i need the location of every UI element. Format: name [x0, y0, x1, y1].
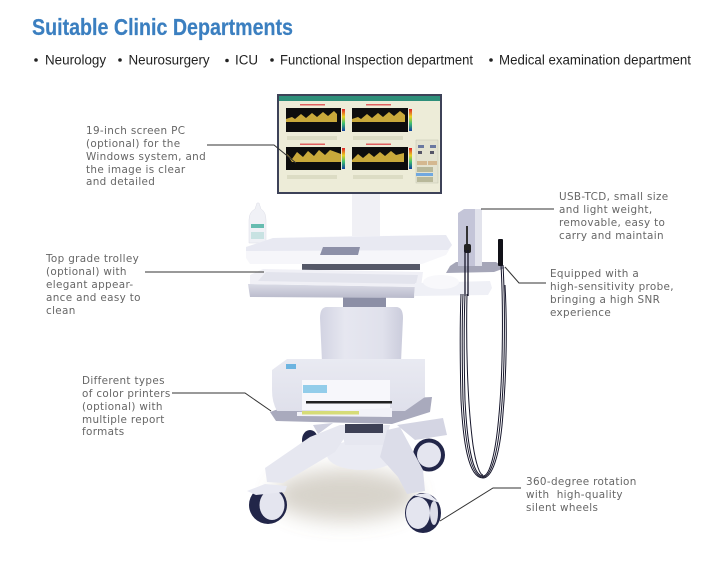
callout: screen PC: and detailed — [86, 176, 155, 188]
callout: trolley: (optional) with — [46, 266, 127, 278]
side shelf — [414, 281, 492, 296]
callout: USB-TCD: removable, easy to — [559, 217, 665, 229]
callout: wheels: silent wheels — [526, 502, 598, 514]
leader line — [505, 267, 546, 283]
probe and cable — [460, 239, 506, 478]
mouse — [423, 275, 459, 289]
screen — [279, 96, 440, 192]
callout: wheels: with high-quality — [526, 489, 623, 501]
callout: probe — [505, 267, 674, 319]
callout: trolley: clean — [46, 305, 76, 317]
monitor — [277, 94, 442, 194]
callout: screen PC: 19-inch screen PC — [86, 125, 185, 137]
callout: trolley: ance and easy to — [46, 292, 141, 304]
callout: printers: of color printers — [82, 388, 171, 400]
callout: wheels — [440, 476, 637, 521]
callout: USB-TCD: USB-TCD, small size — [559, 191, 668, 203]
keyboard tray — [248, 269, 423, 298]
callout: USB-TCD — [481, 191, 668, 242]
wheelbase — [265, 418, 447, 494]
callout: printers: multiple report — [82, 414, 165, 426]
department list: Medical examination department — [499, 52, 691, 68]
department list: Functional Inspection department — [280, 52, 473, 68]
leader line — [481, 208, 554, 210]
department list: ICU — [235, 52, 258, 68]
title: Suitable Clinic Departments — [32, 14, 293, 40]
device: medical trolley — [246, 94, 505, 533]
department list: Neurology — [45, 52, 106, 68]
printer — [272, 359, 425, 417]
callout: probe: high-sensitivity probe, — [550, 281, 674, 293]
callout: printers: formats — [82, 426, 125, 438]
dark tray bar — [302, 264, 420, 270]
callout: screen PC: (optional) for the — [86, 138, 180, 150]
callout: printers: Different types — [82, 375, 165, 387]
front left caster — [247, 484, 287, 524]
leader line — [440, 488, 521, 521]
leader line — [145, 271, 264, 273]
device holder — [446, 262, 505, 273]
stand — [352, 194, 380, 238]
column — [320, 296, 403, 362]
waveform charts — [286, 104, 412, 170]
department list — [34, 52, 691, 68]
department list: Neurosurgery — [128, 52, 210, 68]
tray — [246, 235, 452, 264]
callout: wheels: 360-degree rotation — [526, 476, 637, 488]
floor shadow — [273, 469, 417, 521]
callout: screen PC: the image is clear — [86, 164, 186, 176]
leader line — [207, 145, 296, 163]
callout: probe: bringing a high SNR — [550, 294, 660, 306]
callout: USB-TCD: and light weight, — [559, 204, 652, 216]
callout: screen PC: Windows system, and — [86, 151, 206, 163]
callout: probe: Equipped with a — [550, 268, 639, 280]
callout: trolley — [45, 253, 264, 317]
USB-TCD unit — [458, 209, 482, 266]
front right caster — [405, 493, 441, 533]
callout: probe: experience — [550, 307, 611, 319]
gel bottle — [249, 203, 266, 243]
callout: screen PC — [86, 125, 296, 188]
control panel — [416, 140, 438, 183]
callout: trolley: elegant appear- — [46, 279, 134, 291]
callout: USB-TCD: carry and maintain — [559, 230, 664, 242]
printer shelf — [270, 397, 432, 424]
callout: trolley: Top grade trolley — [45, 253, 139, 265]
callout: printers: (optional) with — [82, 401, 163, 413]
rear casters — [302, 430, 445, 472]
callout: printers — [82, 375, 271, 438]
leader line — [172, 393, 271, 411]
